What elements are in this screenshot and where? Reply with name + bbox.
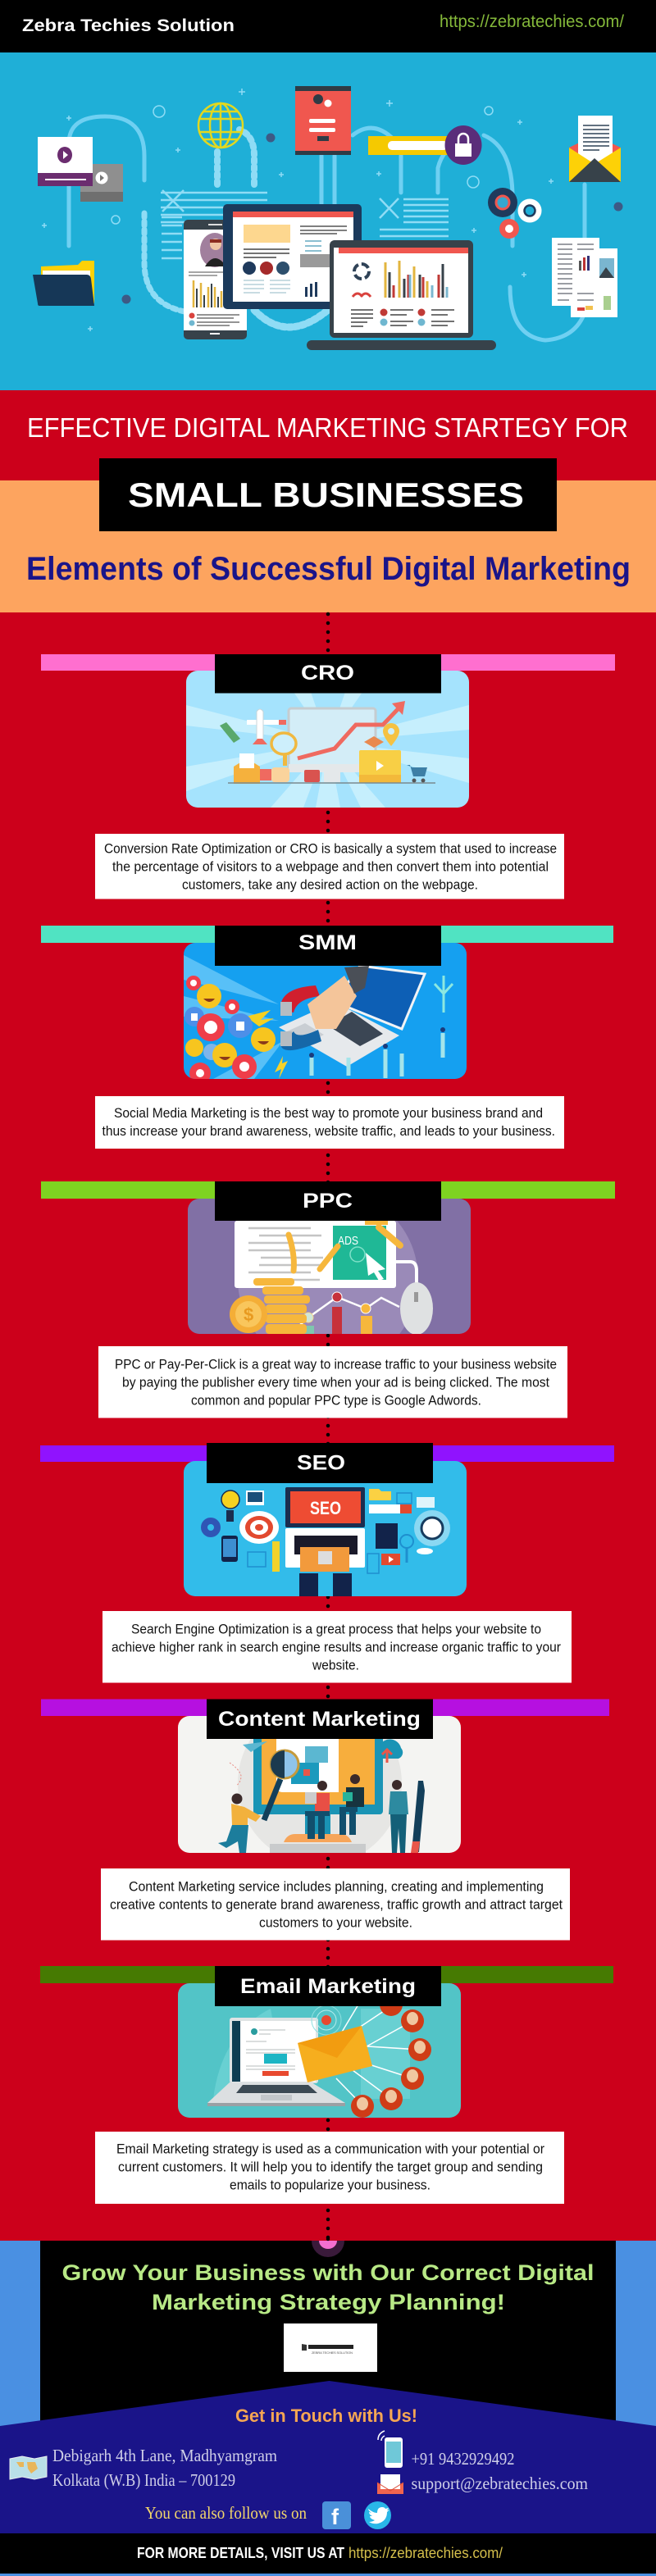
- icon: folder: [33, 261, 94, 306]
- phone number: +91 9432929492: [412, 2449, 515, 2469]
- description: PPC: PPC or Pay-Per-Click is a great way to increase traffic to your business website: [115, 1356, 557, 1372]
- footer bar: https://zebratechies.com/: [348, 2545, 503, 2561]
- brand name: Zebra Techies Solution: [22, 16, 235, 35]
- description: CRO: Conversion Rate Optimization or CRO is basically a system that used to increase: [104, 841, 557, 856]
- panel: CRO: [41, 654, 615, 899]
- heading: small businesses: SMALL BUSINESSES: [128, 476, 524, 514]
- icon: login tablet: [295, 86, 351, 155]
- illustration: email marketing: [178, 1983, 461, 2118]
- description: SMM: [95, 1096, 564, 1149]
- logo: ZEBRA TECHIES SOLUTION: [312, 2351, 353, 2355]
- description: PPC: common and popular PPC type is Google Adwords.: [191, 1392, 481, 1409]
- closing section: [0, 2237, 656, 2576]
- title tab: CRO: [215, 654, 441, 694]
- icon: phone: [184, 220, 247, 339]
- illustration: PPC: $: [244, 1304, 253, 1325]
- description: email marketing: [95, 2132, 564, 2204]
- contact heading: Get in Touch with Us!: [235, 2405, 417, 2426]
- icon: password bar and lock: [368, 125, 482, 165]
- heading: small businesses: [99, 458, 557, 531]
- connector end circle: [312, 2237, 344, 2257]
- icon: facebook: [322, 2501, 351, 2529]
- icon: phone: [378, 2431, 403, 2468]
- follow text: You can also follow us on: [145, 2503, 307, 2523]
- title tab: CRO: CRO: [301, 662, 354, 685]
- heading: elements: Elements of Successful Digital Marketing: [26, 551, 631, 587]
- illustration: PPC: [188, 1199, 471, 1334]
- address: Debigarh 4th Lane, Madhyamgram: [52, 2446, 277, 2465]
- email address: support@zebratechies.com: [412, 2474, 588, 2493]
- illustration: SEO: [184, 1461, 467, 1598]
- description: SEO: website.: [312, 1658, 359, 1673]
- icon: facebook: f: [331, 2505, 339, 2529]
- panel: SMM: [41, 926, 613, 1149]
- illustration: SEO: SEO: [310, 1498, 341, 1518]
- icon: gears: [488, 188, 541, 239]
- icon: tablet dashboard: [223, 204, 362, 309]
- description: content marketing: Content Marketing service includes planning, creating and implementing: [129, 1879, 544, 1894]
- icon: video cards: [38, 137, 123, 202]
- icon: documents: [552, 238, 617, 317]
- description: email marketing: emails to popularize your business.: [230, 2178, 430, 2192]
- illustration: SMM: [184, 943, 467, 1084]
- description: content marketing: [101, 1868, 570, 1940]
- header bar: [0, 0, 656, 52]
- description: content marketing: creative contents to generate brand awareness, traffic growth and attract target: [110, 1897, 563, 1912]
- address: Kolkata (W.B) India – 700129: [52, 2470, 235, 2490]
- panel: SEO: [40, 1443, 614, 1682]
- panel: content marketing: [41, 1699, 609, 1940]
- call to action heading: Grow Your Business with Our Correct Digital: [62, 2260, 594, 2285]
- icon: map: [10, 2456, 47, 2479]
- panel: PPC: [41, 1181, 615, 1418]
- icon: twitter: [364, 2501, 391, 2529]
- title tab: SMM: [215, 926, 441, 966]
- logo: [284, 2323, 377, 2372]
- illustration: content marketing: [178, 1716, 461, 1853]
- description: PPC: [98, 1346, 567, 1418]
- description: CRO: [95, 834, 564, 899]
- title tab: content marketing: [207, 1699, 433, 1739]
- icon: laptop dashboard: [307, 240, 496, 350]
- footer bar: FOR MORE DETAILS, VISIT US AT: [137, 2545, 344, 2561]
- title tab: SMM: SMM: [298, 931, 357, 954]
- hero illustration: [0, 52, 656, 390]
- panel: email marketing: [40, 1966, 613, 2204]
- website url: https://zebratechies.com/: [440, 12, 624, 31]
- description: PPC: by paying the publisher every time when your ad is being clicked. The most: [122, 1374, 549, 1390]
- description: email marketing: Email Marketing strategy is used as a communication with your potential or: [116, 2141, 544, 2156]
- title tab: SEO: [207, 1443, 433, 1483]
- footer bar: [0, 2533, 656, 2574]
- title tab: email marketing: Email Marketing: [240, 1975, 416, 1998]
- illustration: CRO: [186, 671, 469, 808]
- description: SEO: achieve higher rank in search engine results and increase organic traffic to your: [112, 1640, 561, 1654]
- title tab: email marketing: [215, 1966, 441, 2006]
- description: CRO: customers, take any desired action on the webpage.: [182, 877, 478, 892]
- dotted connector: [326, 614, 330, 2243]
- description: content marketing: customers to your website.: [259, 1915, 412, 1930]
- icon: globe: [198, 103, 243, 148]
- description: SMM: Social Media Marketing is the best way to promote your business brand and: [114, 1105, 543, 1121]
- description: CRO: the percentage of visitors to a webpage and then convert them into potential: [112, 859, 549, 874]
- title tab: PPC: PPC: [303, 1190, 353, 1213]
- title tab: PPC: [215, 1181, 441, 1221]
- description: SEO: [102, 1611, 572, 1682]
- illustration: PPC: ADS: [338, 1234, 358, 1248]
- icon: email: [377, 2474, 403, 2494]
- call to action heading: Marketing Strategy Planning!: [152, 2290, 505, 2314]
- description: SEO: Search Engine Optimization is a great process that helps your website to: [131, 1622, 541, 1636]
- address: [52, 2446, 277, 2490]
- description: SMM: thus increase your brand awareness, website traffic, and leads to your business.: [102, 1123, 555, 1139]
- contact pentagon: [0, 2381, 656, 2533]
- title tab: SEO: SEO: [297, 1451, 345, 1474]
- icon: envelope: [569, 116, 621, 182]
- orange title band: [0, 480, 656, 612]
- call to action heading: [62, 2260, 594, 2314]
- title tab: content marketing: Content Marketing: [218, 1708, 421, 1731]
- description: email marketing: current customers. It will help you to identify the target group and sending: [118, 2160, 543, 2174]
